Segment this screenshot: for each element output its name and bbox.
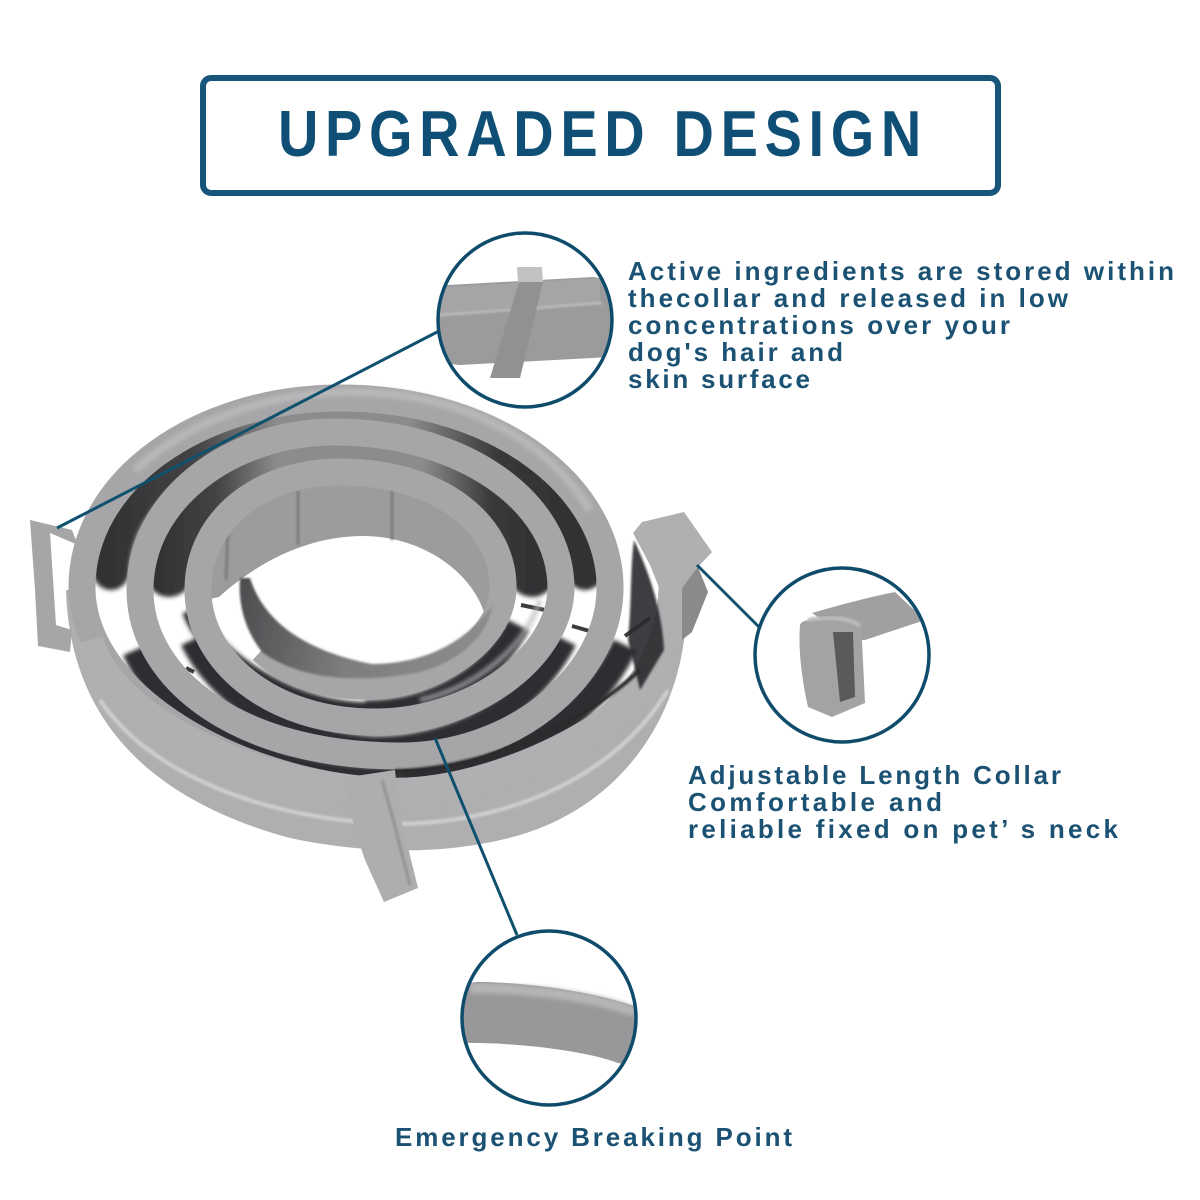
leader line: bottom callout <box>435 738 517 935</box>
callout text: emergency breaking point: Emergency Breaking Point <box>395 1122 792 1152</box>
inner free end <box>240 578 492 678</box>
leader line: right callout <box>697 565 759 627</box>
dark line under front rim <box>395 670 640 771</box>
front rim tone <box>90 545 672 791</box>
callout circle: buckle end <box>755 568 929 742</box>
title box <box>203 78 998 193</box>
callout text: active ingredients: concentrations over your <box>628 310 1010 340</box>
rim highlights <box>135 392 590 510</box>
spiral rim <box>82 398 672 791</box>
callout text: adjustable length: Adjustable Length Collar <box>688 760 1061 790</box>
front dark walls <box>135 610 625 780</box>
support bars <box>121 605 650 688</box>
right buckle head <box>633 512 712 610</box>
callout circle: strap with loop <box>430 233 612 407</box>
inner far wall <box>205 480 498 612</box>
callout text: active ingredients <box>628 256 1174 394</box>
collar product photo <box>30 392 712 902</box>
far walls and side shadows <box>111 415 585 574</box>
callout text: active ingredients: thecollar and released in low <box>628 283 1069 313</box>
title: UPGRADED DESIGN <box>278 97 921 170</box>
left loop <box>30 520 78 652</box>
callout text: active ingredients: skin surface <box>628 364 810 394</box>
bottom tab <box>342 770 418 902</box>
leader line: top callout <box>57 330 441 528</box>
callout text: active ingredients: Active ingredients are stored within <box>628 256 1174 286</box>
callout text: adjustable length: reliable fixed on pet’ s neck <box>688 814 1119 844</box>
callout circle: breaking point <box>460 931 640 1105</box>
callout text: adjustable length <box>688 760 1119 844</box>
callout text: active ingredients: dog's hair and <box>628 337 843 367</box>
callout text: adjustable length: Comfortable and <box>688 787 942 817</box>
outer front wall <box>66 545 686 850</box>
